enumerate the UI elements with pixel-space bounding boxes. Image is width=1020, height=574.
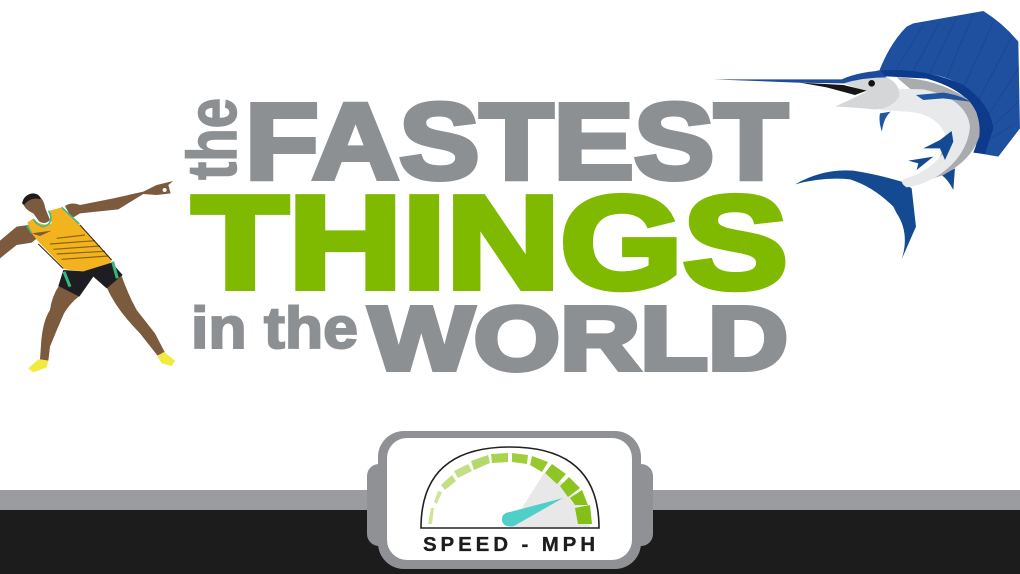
gauge dial outline — [421, 447, 599, 528]
grey band — [0, 490, 1020, 510]
title word: the (rotated): the — [173, 98, 251, 180]
bill upper — [713, 71, 887, 83]
badge frame — [378, 431, 641, 569]
badge side lugs — [367, 464, 653, 546]
gauge grey wedge — [510, 473, 590, 527]
body white belly — [880, 88, 970, 187]
dorsal stripe — [916, 93, 970, 102]
sail fin ribs — [897, 13, 1020, 143]
shoes — [28, 359, 48, 372]
left leg — [40, 285, 79, 361]
gauge needle — [502, 498, 563, 526]
black shorts — [58, 263, 123, 297]
title word: FASTEST: FASTEST — [245, 80, 788, 202]
hair — [22, 193, 41, 205]
icon: sprinter — [0, 181, 175, 372]
title word: THINGS: THINGS — [192, 169, 788, 316]
black band — [0, 510, 1020, 574]
speedometer badge — [367, 431, 653, 569]
shorts trim — [64, 262, 117, 287]
gauge label: SPEED - MPH — [423, 533, 595, 556]
vest stripes — [50, 235, 108, 259]
title words: in the: in the — [191, 296, 358, 361]
vest trim — [33, 211, 51, 227]
tail fin — [795, 170, 916, 259]
yellow vest — [27, 207, 112, 271]
ventral fins — [923, 131, 953, 160]
bent arm — [0, 225, 50, 258]
eye — [868, 80, 875, 87]
sail base band — [877, 70, 993, 154]
head — [835, 77, 899, 109]
badge inner panel — [387, 438, 632, 560]
pectoral fin — [879, 112, 891, 132]
pointing hand — [32, 231, 52, 236]
right leg — [107, 276, 165, 355]
head and neck — [23, 194, 50, 223]
sail fin — [879, 11, 1020, 157]
title word: WORLD: WORLD — [369, 290, 788, 390]
gauge tick segments — [428, 453, 592, 524]
icon: sailfish — [713, 11, 1020, 259]
title — [173, 80, 788, 390]
body grey back — [897, 77, 980, 182]
pointing arm — [65, 181, 173, 218]
bill lower black — [800, 83, 867, 95]
rear fin — [942, 168, 955, 190]
